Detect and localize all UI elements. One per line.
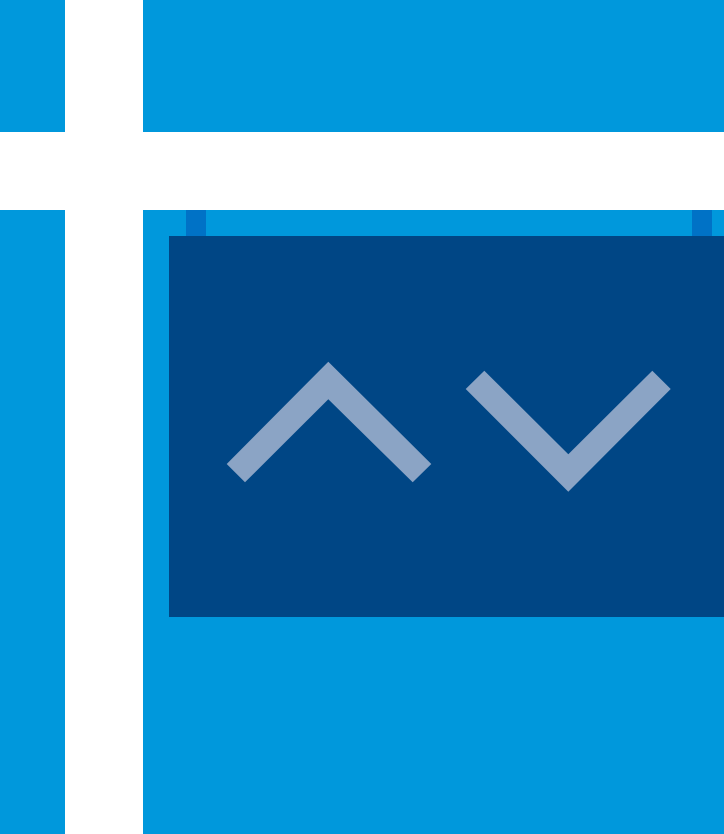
right hanger tab [692,210,712,236]
dark navy panel [169,236,724,617]
white vertical grid bar [65,0,143,834]
left hanger tab [186,210,206,236]
icon: down chevron [466,371,671,492]
white horizontal grid bar [0,132,724,210]
icon: up chevron [227,362,431,482]
